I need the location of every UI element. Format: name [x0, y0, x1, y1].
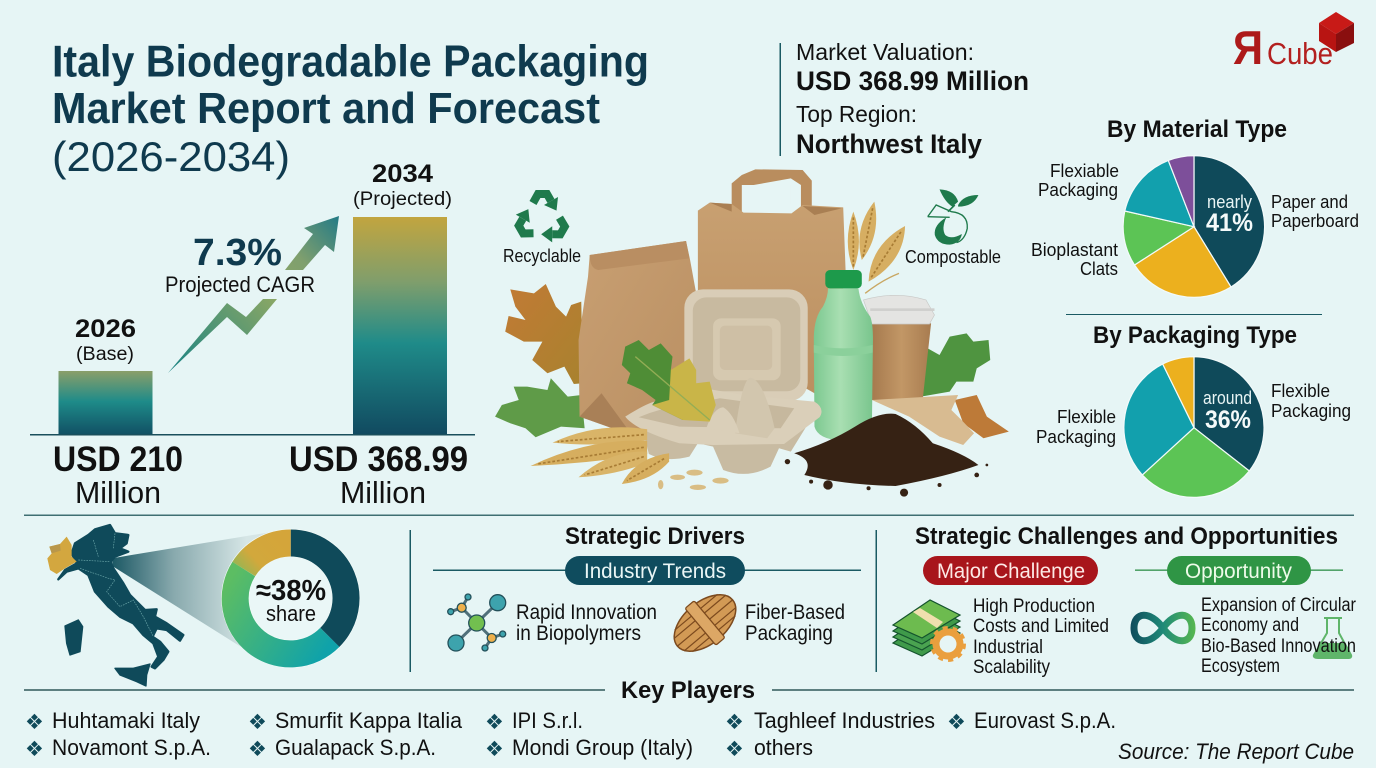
pie chart: by packaging type: Packaging: [1271, 401, 1351, 421]
market valuation block: Market Valuation:: [796, 39, 974, 65]
title: (2026-2034): [52, 133, 290, 180]
mainland: [58, 525, 183, 668]
title: Italy Biodegradable Packaging: [52, 38, 649, 86]
pulp cup carrier: [625, 378, 822, 474]
logo: RCube: [1233, 12, 1354, 74]
pie chart: by packaging type: 36%: [1205, 406, 1251, 434]
bar chart: market growth: [30, 160, 475, 510]
pie chart: by packaging type: around: [1203, 388, 1252, 408]
donut chart: regional share: ≈38%: [256, 575, 326, 607]
list: key players: ❖: [485, 710, 504, 734]
text: rapid innovation: in Biopolymers: [516, 622, 641, 645]
bar chart: market growth: (Base): [76, 344, 134, 365]
list: key players: Mondi Group (Italy): [512, 735, 693, 760]
list: key players: IPI S.r.l.: [512, 708, 583, 733]
pie chart: by material type: [1031, 116, 1359, 297]
grains: [658, 470, 729, 490]
icon: compostable: [928, 189, 978, 245]
text: high production costs: [973, 596, 1109, 678]
logo: RCube: Я: [1233, 21, 1263, 74]
pie chart: by material type: nearly: [1207, 192, 1252, 212]
heading: key players: Key Players: [621, 677, 755, 704]
list: key players: Taghleef Industries: [754, 708, 935, 733]
leaf: green left: [495, 378, 585, 437]
paper bag: front: [579, 241, 696, 437]
heading: strategic drivers: Strategic Drivers: [565, 523, 745, 550]
market valuation block: Top Region:: [796, 101, 917, 127]
arrow: growth trend: [168, 216, 339, 373]
text: high production costs: High Production: [973, 596, 1095, 617]
list: key players: Smurfit Kappa Italia: [275, 708, 463, 733]
bar chart: market growth: USD 368.99: [289, 440, 468, 479]
pie chart: by packaging type: [1036, 322, 1351, 497]
list: key players: ❖: [725, 710, 744, 734]
title: [52, 38, 649, 180]
list: key players: ❖: [725, 737, 744, 761]
coffee cup: [863, 295, 934, 400]
pie chart: by material type: Paperboard: [1271, 211, 1359, 231]
donut chart: regional share: share: [266, 601, 316, 626]
list: key players: [25, 708, 1116, 761]
map: Italy with highlighted Northwest: [47, 525, 283, 686]
bar chart: market growth: 2026: [75, 315, 136, 343]
list: key players: Eurovast S.p.A.: [974, 708, 1116, 733]
bar chart: market growth: Projected CAGR: [165, 272, 315, 297]
list: key players: ❖: [25, 737, 44, 761]
text: circular economy: [1201, 595, 1357, 677]
northwest region: [47, 537, 77, 574]
illustration: biodegradable packaging products: [495, 169, 1009, 497]
bar chart: market growth: USD 210: [53, 440, 183, 479]
pie chart: by material type: Packaging: [1038, 180, 1118, 200]
pie chart: by material type: Paper and: [1271, 192, 1348, 212]
leaf: green right: [921, 333, 990, 397]
pie chart: by packaging type: Flexible: [1271, 381, 1330, 401]
pill: industry trends: [565, 556, 745, 585]
list: key players: others: [754, 735, 813, 760]
list: key players: ❖: [248, 737, 267, 761]
text: fiber-based packaging: Fiber-Based: [745, 601, 845, 624]
label: compostable: Compostable: [905, 247, 1001, 267]
green bottle: [814, 270, 873, 441]
text: fiber-based packaging: [745, 601, 845, 645]
pie chart: by packaging type: By Packaging Type: [1093, 322, 1297, 349]
bar: 2034: [353, 217, 447, 434]
pill: major challenge: [923, 556, 1098, 585]
pie chart: by material type: By Material Type: [1107, 116, 1287, 143]
pill: opportunity: [1135, 556, 1343, 585]
leaf: centre oak: [622, 340, 716, 422]
pie chart: by material type: Clats: [1080, 259, 1118, 279]
market valuation block: USD 368.99 Million: [796, 66, 1029, 96]
paper bag: back: [698, 169, 846, 393]
list: key players: ❖: [25, 710, 44, 734]
text: high production costs: Scalability: [973, 657, 1050, 678]
Sardinia: [65, 620, 83, 655]
pulp clamshell tray: [684, 289, 808, 401]
label: recyclable: Recyclable: [503, 246, 581, 266]
list: key players: Gualapack S.p.A.: [275, 735, 436, 760]
text: high production costs: Costs and Limited: [973, 616, 1109, 637]
pie chart: by packaging type: Flexible: [1057, 407, 1116, 427]
icon: money and gear: [893, 600, 964, 660]
pie chart: by material type: Bioplastant: [1031, 240, 1118, 260]
pie chart: by material type: Flexiable: [1050, 161, 1119, 181]
icon: recyclable: [513, 194, 567, 244]
leaf: orange left: [505, 284, 583, 384]
bar chart: market growth: Million: [340, 475, 426, 510]
bar chart: market growth: 2034: [372, 160, 433, 188]
list: key players: ❖: [248, 710, 267, 734]
text: rapid innovation: Rapid Innovation: [516, 601, 657, 624]
text: circular economy: Ecosystem: [1201, 656, 1280, 677]
pill: industry trends: Industry Trends: [584, 560, 726, 583]
list: key players: Novamont S.p.A.: [52, 735, 211, 760]
list: key players: Huhtamaki Italy: [52, 708, 200, 733]
bar chart: market growth: Million: [75, 475, 161, 510]
text: rapid innovation: [516, 601, 657, 645]
market valuation block: [780, 39, 1029, 159]
icon: infinity loop: [1134, 615, 1192, 641]
title: Market Report and Forecast: [52, 84, 600, 133]
market valuation block: Northwest Italy: [796, 129, 982, 159]
pill: opportunity: Opportunity: [1185, 560, 1292, 583]
bar chart: market growth: 7.3%: [193, 232, 282, 274]
compost soil: [785, 414, 988, 497]
back wheat: [848, 202, 905, 293]
text: fiber-based packaging: Packaging: [745, 622, 833, 645]
text: high production costs: Industrial: [973, 637, 1043, 658]
bar: 2026: [58, 371, 152, 434]
donut chart: regional share: [221, 529, 360, 668]
list: key players: ❖: [947, 710, 966, 734]
funnel to donut: [112, 530, 283, 648]
leaf: dry beige and orange: [872, 395, 1009, 445]
regional borders: [78, 533, 153, 637]
bar chart: market growth: (Projected): [353, 189, 452, 210]
wheat ears: [531, 427, 669, 484]
icon: molecule: [448, 594, 506, 651]
Sicily: [115, 664, 150, 686]
source note: Source: The Report Cube: [1118, 739, 1354, 764]
pie chart: by packaging type: Packaging: [1036, 427, 1116, 447]
pie chart: by material type: 41%: [1206, 209, 1253, 237]
heading: strategic challenges and opportunities: Strategic Challenges and Opportunities: [915, 523, 1338, 550]
logo: RCube: Cube: [1267, 36, 1333, 71]
list: key players: ❖: [485, 737, 504, 761]
icon: flask: [1314, 618, 1351, 658]
pill: major challenge: Major Challenge: [937, 560, 1085, 583]
icon: fiber bundle: [662, 581, 748, 665]
text: circular economy: Economy and: [1201, 615, 1299, 636]
